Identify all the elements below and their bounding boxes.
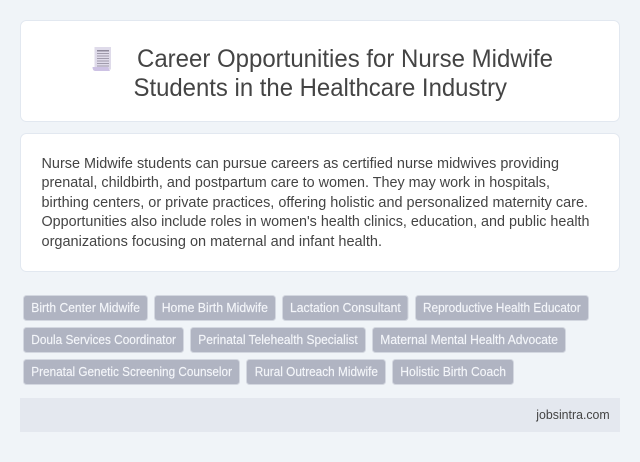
- tag: Reproductive Health Educator: Reproductive Health Educator: [423, 300, 581, 315]
- title: Career Opportunities for Nurse Midwife: [137, 45, 553, 73]
- text block: description: Opportunities also include roles in women's health clinics, education, and public health: [42, 213, 590, 230]
- tag: Maternal Mental Health Advocate: [372, 328, 566, 352]
- title: [134, 45, 553, 102]
- text block: description: Nurse Midwife students can pursue careers as certified nurse midwives providing: [42, 155, 559, 172]
- footer source text: jobsintra.com: [535, 407, 610, 422]
- tag: Prenatal Genetic Screening Counselor: Prenatal Genetic Screening Counselor: [31, 364, 233, 379]
- tags: career roles: [24, 296, 588, 384]
- tag: Holistic Birth Coach: [392, 360, 514, 384]
- text block: description: organizations focusing on maternal and infant health.: [42, 233, 382, 250]
- tag: Prenatal Genetic Screening Counselor: [24, 360, 240, 384]
- tag: Rural Outreach Midwife: [246, 360, 386, 384]
- panel: description card: [20, 134, 620, 272]
- tag: Lactation Consultant: Lactation Consultant: [290, 300, 401, 315]
- tag: Doula Services Coordinator: Doula Services Coordinator: [31, 332, 177, 347]
- text block: description: birthing centers, or private practices, offering holistic and personalized maternity care.: [42, 194, 588, 211]
- text block: description: prenatal, childbirth, and postpartum care to women. They may work in hospitals,: [42, 174, 550, 191]
- tag: Perinatal Telehealth Specialist: Perinatal Telehealth Specialist: [198, 332, 358, 347]
- tag: Maternal Mental Health Advocate: Maternal Mental Health Advocate: [380, 332, 558, 347]
- tag: Home Birth Midwife: Home Birth Midwife: [162, 300, 268, 315]
- tag: Doula Services Coordinator: [24, 328, 184, 352]
- tag: Lactation Consultant: [282, 296, 408, 320]
- footer bar: [20, 398, 620, 432]
- panel: title card: [20, 20, 620, 122]
- text block: description: [42, 155, 590, 250]
- tag: Birth Center Midwife: [24, 296, 148, 320]
- tag: Birth Center Midwife: Birth Center Midwife: [31, 300, 140, 315]
- tag: Holistic Birth Coach: Holistic Birth Coach: [400, 364, 506, 379]
- tag: Perinatal Telehealth Specialist: [190, 328, 366, 352]
- tag: Home Birth Midwife: [154, 296, 276, 320]
- tag: Reproductive Health Educator: [416, 296, 588, 320]
- title: Students in the Healthcare Industry: [134, 74, 507, 102]
- icon: document scroll: [92, 47, 111, 71]
- tag: Rural Outreach Midwife: Rural Outreach Midwife: [255, 364, 378, 379]
